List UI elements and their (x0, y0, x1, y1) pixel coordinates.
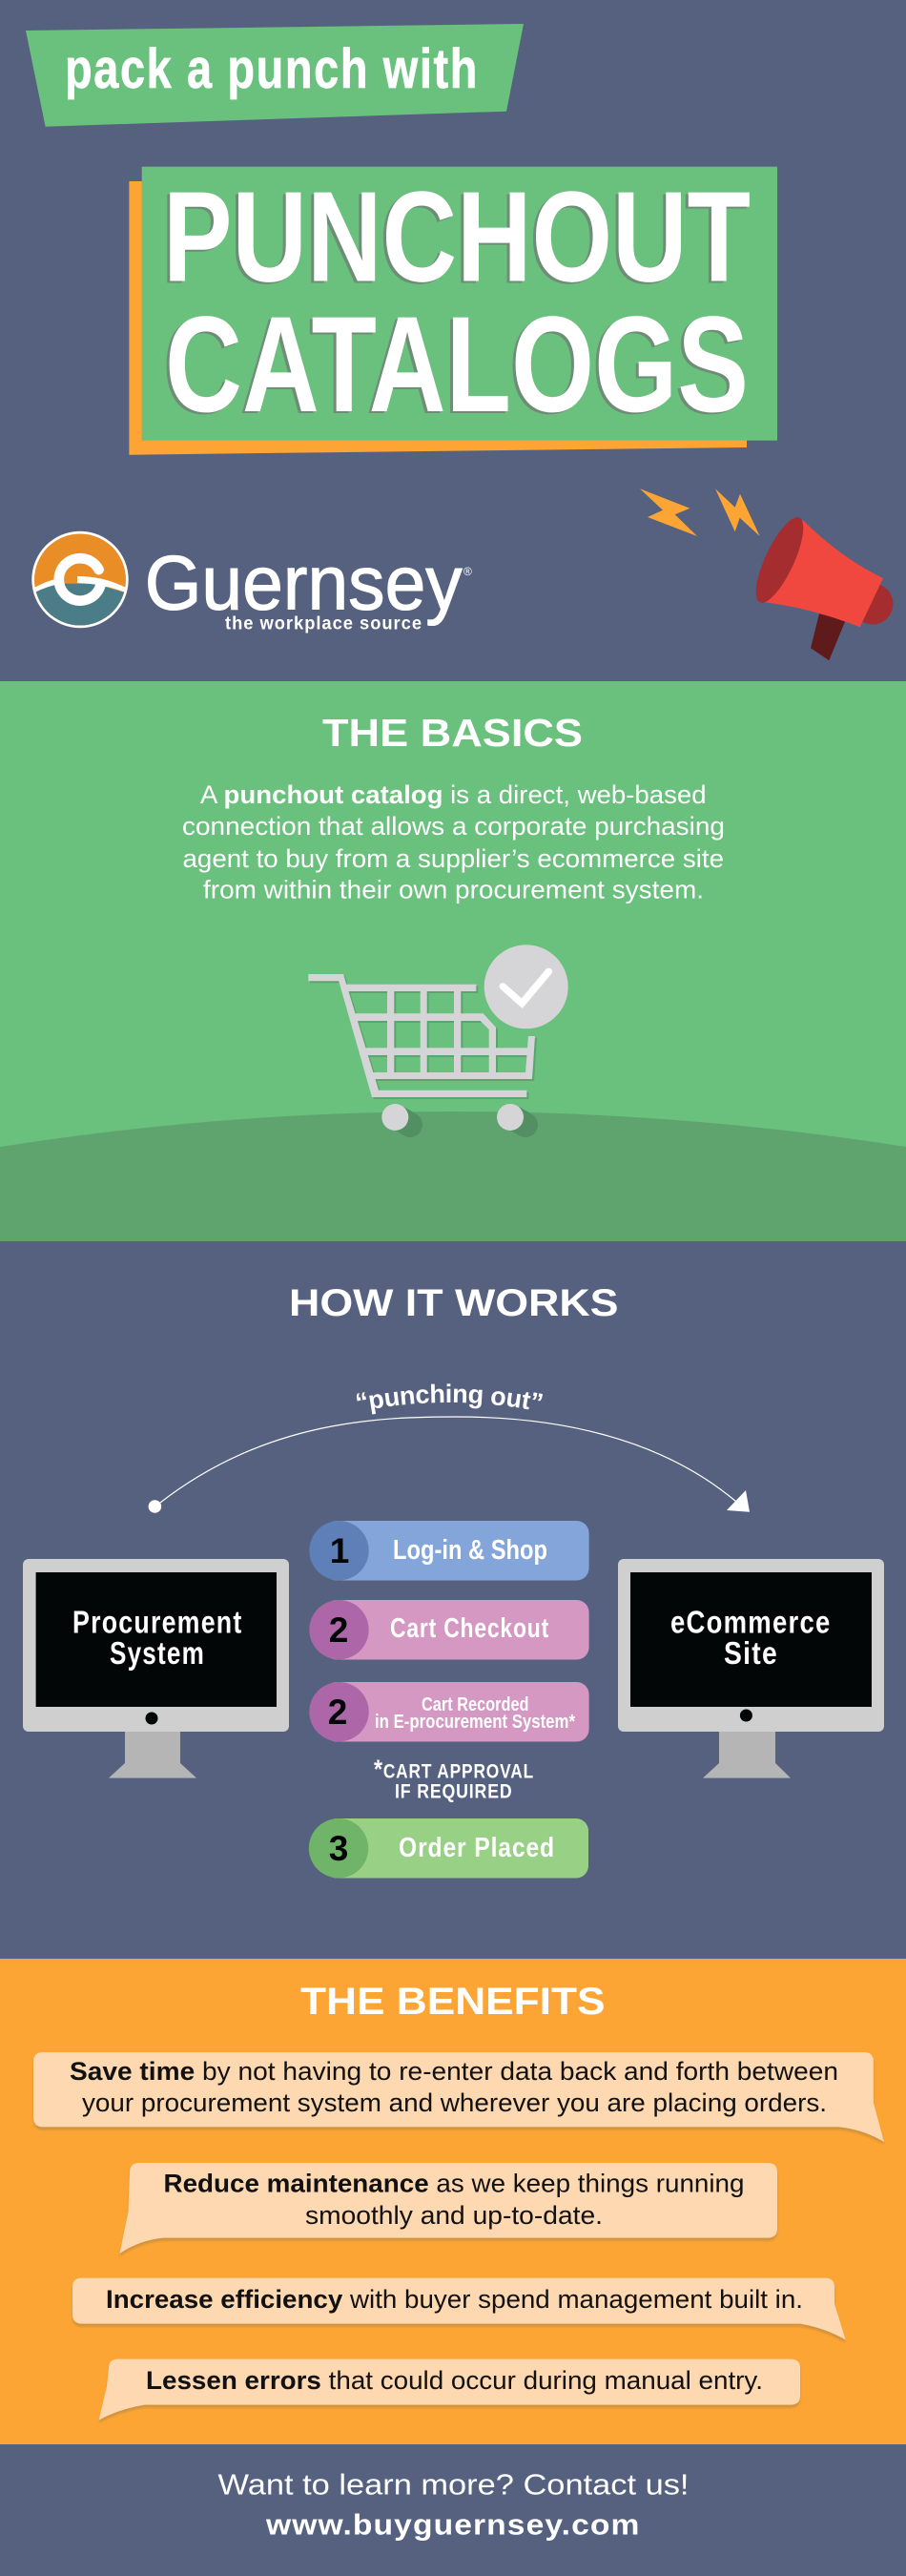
note: cart approval (374, 1755, 534, 1803)
arrow: punching out arc (149, 1417, 750, 1513)
text: contact prompt: Want to learn more? Contact us! (217, 2467, 689, 2502)
hill (0, 1111, 906, 1241)
text block: definition: connection that allows a corporate purchasing (182, 812, 725, 841)
callout: lessen errors: Lessen errors that could occur during manual entry. (146, 2366, 763, 2395)
title block: punchout catalogs: PUNCHOUT (163, 164, 751, 309)
icon: shopping cart (308, 945, 568, 1131)
callout: reduce maintenance: Reduce maintenance as we keep things running (164, 2170, 744, 2198)
panel: header (26, 24, 893, 660)
step: order placed: 3 (329, 1829, 348, 1868)
icon: lightning bolt left (640, 488, 697, 536)
step: cart checkout: Cart Checkout (390, 1613, 549, 1644)
label: punching out: “punching out” (357, 1383, 543, 1414)
monitor: procurement system: System (110, 1635, 205, 1671)
panel: the basics (0, 681, 906, 1241)
callout: save time: Save time by not having to re-enter data back and forth between (70, 2057, 838, 2086)
step: cart recorded: Cart Recorded (422, 1694, 528, 1715)
step: order placed (309, 1818, 588, 1878)
note: cart approval: *CART APPROVAL (374, 1755, 534, 1784)
heading: the basics: THE BASICS (322, 711, 583, 755)
step: log-in and shop: Log-in & Shop (393, 1535, 547, 1566)
step: log-in and shop: 1 (330, 1531, 349, 1570)
title block: punchout catalogs: CATALOGS (165, 289, 749, 441)
text block: definition: A punchout catalog is a direct, web-based (200, 780, 707, 809)
callout: increase efficiency: Increase efficiency with buyer spend management built in. (106, 2285, 803, 2314)
callout: lessen errors (99, 2359, 800, 2420)
step: cart checkout: 2 (329, 1610, 348, 1650)
callout: increase efficiency (72, 2278, 846, 2339)
monitor: procurement system: Procurement (72, 1605, 242, 1639)
icon: check badge (484, 945, 568, 1028)
note: cart approval: IF REQUIRED (395, 1781, 513, 1803)
step: cart checkout (309, 1600, 589, 1660)
panel: footer (0, 2444, 906, 2576)
text: website: www.buyguernsey.com (265, 2508, 641, 2542)
step: cart recorded: 2 (328, 1693, 347, 1732)
step: cart recorded (309, 1682, 589, 1742)
heading: how it works: HOW IT WORKS (289, 1282, 618, 1324)
text block: definition: from within their own procurement system. (203, 876, 704, 904)
banner: pack a punch with: pack a punch with (65, 38, 479, 100)
text block: definition (182, 780, 725, 904)
panel: the benefits (0, 1959, 906, 2444)
monitor: ecommerce site: Site (724, 1635, 778, 1671)
callout: reduce maintenance: smoothly and up-to-date. (305, 2201, 603, 2230)
step: log-in and shop (309, 1521, 589, 1580)
icon: megaphone (747, 511, 893, 660)
step: cart recorded: in E-procurement System* (375, 1712, 575, 1733)
icon: lightning bolt right (715, 488, 760, 536)
monitor: ecommerce site: eCommerce (670, 1605, 832, 1639)
logo: Guernsey: the workplace source (225, 613, 422, 634)
logo: Guernsey: Guernsey (145, 540, 463, 626)
banner: pack a punch with (26, 24, 524, 127)
monitor: ecommerce site (618, 1559, 884, 1778)
callout: save time: your procurement system and wherever you are placing orders. (82, 2088, 827, 2117)
heading: the benefits: THE BENEFITS (300, 1981, 605, 2023)
callout: save time (33, 2052, 884, 2142)
callout: reduce maintenance (120, 2163, 777, 2254)
text block: definition: agent to buy from a supplier’s ecommerce site (183, 844, 724, 873)
title block: punchout catalogs (129, 164, 777, 455)
step: order placed: Order Placed (399, 1833, 555, 1863)
logo: Guernsey (29, 530, 472, 634)
logo: Guernsey: ® (463, 565, 472, 578)
monitor: procurement system (23, 1559, 289, 1778)
panel: how it works (23, 1282, 884, 1878)
